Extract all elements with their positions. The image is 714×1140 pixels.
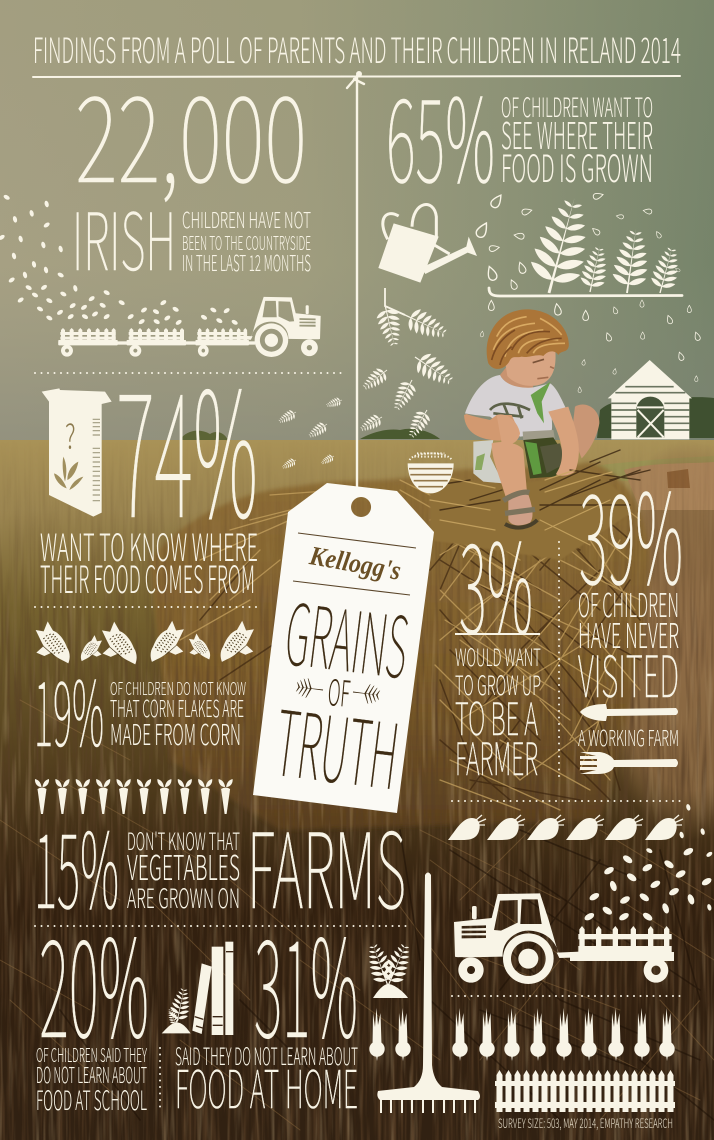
OF: OF (326, 664, 352, 718)
left wheat branch (295, 677, 324, 700)
stat: 3% would want to grow up to be a farmer: TO BE A (455, 683, 538, 748)
stat: IRISH children have not been to the countryside: IN THE LAST 12 MONTHS (182, 246, 311, 278)
stat: 15% vegetables grown on farms (34, 787, 406, 938)
icon: onion row (369, 1008, 675, 1061)
stat: IRISH children have not been to the countryside: IRISH (72, 178, 176, 293)
top rule with string knot and vertical string (33, 72, 680, 492)
stat: 3% would want to grow up to be a farmer: TO GROW UP (455, 664, 541, 703)
stat: 3% would want to grow up to be a farmer: FARMER (455, 723, 538, 788)
text: DO NOT LEARN ABOUT (36, 1058, 147, 1090)
icon: barn (608, 360, 692, 439)
stat: 19% corn flakes: 19% (34, 642, 104, 772)
text: 20% (39, 880, 149, 1076)
stat: 3% would want to grow up to be a farmer (455, 489, 541, 788)
stat: 19% corn flakes: OF CHILDREN DO NOT KNOW (110, 675, 246, 701)
text: 74% (116, 316, 258, 567)
text: 65% (386, 48, 495, 216)
icon: garden trowel (580, 704, 678, 721)
icon: scattering grains right (583, 804, 713, 922)
icon: cereal box with question mark (42, 388, 112, 517)
dotted vertical divider right (558, 542, 560, 778)
icon: large tractor with trailer (454, 893, 674, 984)
text: food at home: SAID THEY DO NOT LEARN ABOUT (175, 1037, 358, 1072)
icon: row of growing plants (489, 192, 684, 300)
icon: tractor top (237, 297, 321, 357)
text: 3% (459, 489, 533, 669)
icon: watering can (378, 205, 477, 283)
stat: 39% have never visited a working farm (578, 439, 683, 753)
text: food at school: FOOD AT SCHOOL (36, 1079, 147, 1118)
dotted divider under 74% (35, 606, 262, 608)
text: of children want to see where their food is grown (501, 86, 653, 193)
dotted divider above beets (452, 800, 682, 802)
icon: garden fork (580, 752, 678, 774)
text: 31% (254, 880, 358, 1076)
icon: seedling by rake (362, 939, 417, 998)
icon: corn row (36, 621, 254, 664)
dotted vertical divider bottom (159, 1048, 161, 1110)
icon: three grain wagons (58, 328, 255, 357)
text: food at home (175, 1037, 358, 1123)
stat: 19% corn flakes: MADE FROM CORN (110, 712, 241, 754)
straw strands (0, 480, 714, 1130)
stat: 3% would want to grow up to be a farmer: WOULD WANT (455, 638, 541, 673)
icon: falling leaves and sprigs (276, 288, 459, 472)
label tag: Kellogg's Grains of Truth: TRUTH (269, 671, 406, 815)
text: food at home: FOOD AT HOME (175, 1048, 358, 1123)
text: food at school: OF CHILDREN SAID THEY (36, 1041, 147, 1068)
photo: child sitting on hay bale (464, 309, 599, 528)
stat: 15% vegetables grown on farms: 15% (34, 787, 119, 938)
dotted divider under tractor right (452, 995, 682, 997)
dotted divider under tractor (35, 372, 343, 374)
icon: bowl of cereal (408, 453, 454, 493)
icon: water droplets (475, 192, 701, 393)
text: want to know where their food comes from: WANT TO KNOW WHERE (40, 517, 258, 572)
icon: picket fence (495, 1070, 675, 1112)
hay bale top behind the child (430, 468, 632, 560)
stat: 22,000: 22,000 (75, 45, 307, 217)
stat: 15% vegetables grown on farms: ARE GROWN ON (127, 877, 240, 916)
label tag: Kellogg's Grains of Truth: GRAINS (280, 568, 415, 703)
Kellogg's wordmark: Kellogg's (307, 540, 403, 586)
icon: cereal box with question mark: ? (65, 409, 76, 458)
stat: IRISH children have not been to the countryside: BEEN TO THE COUNTRYSIDE (182, 229, 311, 256)
text: food at school (36, 1041, 147, 1118)
stat: 15% vegetables grown on farms: DON'T KNOW THAT (127, 822, 240, 857)
icon: beet row (448, 815, 683, 840)
icon: scattering grains left (0, 194, 239, 326)
text: want to know where their food comes from (40, 517, 258, 604)
stat: 15% vegetables grown on farms: VEGETABLES (127, 841, 240, 890)
right wheat branch (352, 682, 381, 705)
icon: carrot row (35, 779, 233, 814)
stat: IRISH children have not been to the countryside: CHILDREN HAVE NOT (182, 203, 311, 235)
text: THEIR FOOD COMES FROM (40, 549, 255, 604)
hay strands over the child (430, 450, 650, 545)
stat: 15% vegetables grown on farms: FARMS (247, 787, 406, 938)
label tag: Kellogg's Grains of Truth (253, 483, 434, 815)
dotted divider above bottom row (35, 925, 412, 927)
stat: 19% corn flakes: THAT CORN FLAKES ARE (110, 690, 244, 724)
icon: books and seedling (162, 942, 233, 1035)
icon: garden rake (377, 872, 480, 1113)
